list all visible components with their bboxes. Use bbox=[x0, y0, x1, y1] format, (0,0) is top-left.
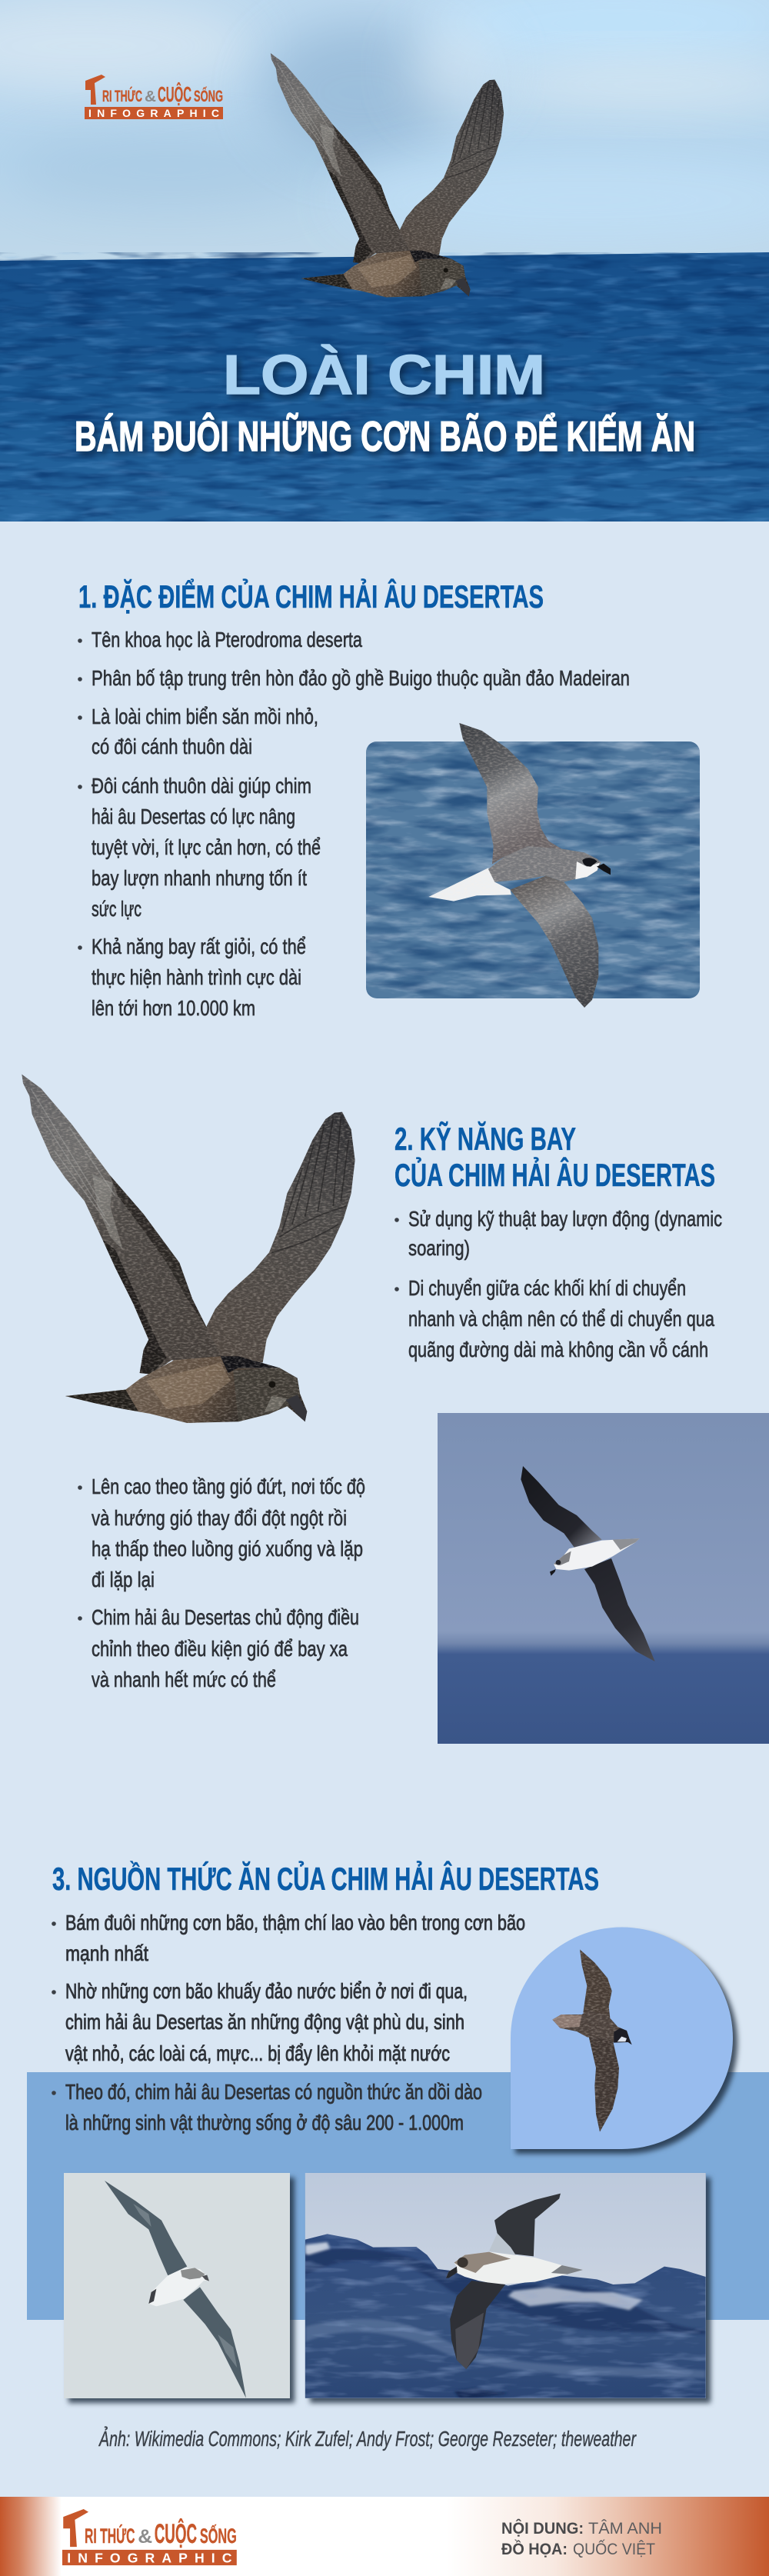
bullet list: section 2 left: Lên cao theo tầng gió đứt, nơi tốc độ bbox=[92, 1475, 365, 1498]
bullet list: section 3: Theo đó, chim hải âu Desertas có nguồn thức ăn dồi dào bbox=[65, 2080, 482, 2104]
logo: Tri Thức & Cuộc Sống Infographic: INFOGRAPHIC bbox=[88, 107, 219, 119]
logo: Tri Thức & Cuộc Sống Infographic: SỐNG bbox=[194, 87, 223, 105]
photo: grey petrel over sea bbox=[428, 723, 611, 1008]
hero sea bbox=[0, 252, 769, 522]
panel: footer bbox=[0, 2497, 769, 2576]
footer credits bbox=[501, 2519, 662, 2558]
bullet list: section 1: tuyệt vời, ít lực cản hơn, có thể bbox=[92, 835, 321, 859]
bullet list: section 2 right: Di chuyển giữa các khối khí di chuyển bbox=[408, 1276, 686, 1300]
bullet list: section 2 left: hạ thấp theo luồng gió xuống và lặp bbox=[92, 1537, 363, 1561]
panel: section 3 food source bbox=[27, 1860, 769, 2451]
bullet list: section 1: Khả năng bay rất giỏi, có thể bbox=[92, 935, 306, 958]
bullet list: section 1: bay lượn nhanh nhưng tốn ít bbox=[92, 866, 307, 890]
logo: Tri Thức & Cuộc Sống Infographic bbox=[85, 75, 223, 119]
bullet list: section 1: Là loài chim biển săn mồi nhỏ, bbox=[92, 705, 318, 728]
footer logo: & bbox=[138, 2526, 152, 2548]
bullet list: section 3: Bám đuôi những cơn bão, thậm chí lao vào bên trong cơn bão bbox=[65, 1911, 525, 1934]
bullet list: section 3: mạnh nhất bbox=[65, 1941, 148, 1965]
heading: section 2 bbox=[394, 1121, 715, 1193]
bullet list: section 1: Tên khoa học là Pterodroma deserta bbox=[92, 628, 362, 651]
bullet list: section 1: thực hiện hành trình cực dài bbox=[92, 965, 301, 989]
photo: petrel above horizon bbox=[438, 1413, 769, 1744]
bullet list: section 2 left: và hướng gió thay đổi đột ngột rồi bbox=[92, 1506, 347, 1530]
title: Loài chim: LOÀI CHIM bbox=[223, 345, 545, 406]
bullet list: section 1: Đôi cánh thuôn dài giúp chim bbox=[92, 774, 311, 798]
bullet list: section 1: lên tới hơn 10.000 km bbox=[92, 996, 255, 1020]
panel: section 1 characteristics bbox=[78, 578, 700, 1020]
bullet list: section 3: là những sinh vật thường sống ở độ sâu 200 - 1.000m bbox=[65, 2111, 464, 2134]
large dark petrel bbox=[22, 1075, 355, 1423]
footer logo: RI THỨC bbox=[85, 2524, 135, 2548]
panel: hero banner bbox=[0, 0, 769, 522]
logo: Tri Thức & Cuộc Sống Infographic: & bbox=[145, 88, 156, 105]
footer credits: TÂM ANH bbox=[588, 2520, 662, 2538]
logo: Tri Thức & Cuộc Sống Infographic: RI THỨC bbox=[102, 87, 142, 105]
footer logo: CUỘC bbox=[155, 2518, 197, 2549]
logo: Tri Thức & Cuộc Sống Infographic: CUỘC bbox=[158, 82, 191, 106]
hero sky bbox=[0, 0, 769, 269]
bullet list: section 1 bbox=[78, 628, 630, 1020]
footer logo bbox=[62, 2509, 237, 2565]
bullet list: section 1: sức lực bbox=[92, 897, 141, 921]
footer credits: QUỐC VIỆT bbox=[573, 2540, 655, 2558]
bullet list: section 3: vật nhỏ, các loài cá, mực... bị đẩy lên khỏi mặt nước bbox=[65, 2041, 450, 2065]
bullet list: section 3 bbox=[52, 1911, 525, 2134]
footer credits: ĐỒ HỌA: bbox=[501, 2540, 568, 2558]
footer background bbox=[0, 2497, 769, 2576]
bullet list: section 1: có đôi cánh thuôn dài bbox=[92, 735, 252, 758]
footer logo: INFOGRAPHIC bbox=[67, 2550, 232, 2565]
bullet list: section 2 left: đi lặp lại bbox=[92, 1568, 155, 1591]
footer logo: SỐNG bbox=[200, 2524, 237, 2548]
blue band bbox=[27, 2072, 769, 2320]
heading: section 1: 1. ĐẶC ĐIỂM CỦA CHIM HẢI ÂU DESERTAS bbox=[78, 578, 544, 615]
photo: circular blue sky frame with petrel bbox=[511, 1928, 733, 2149]
bullet list: section 2 right: soaring) bbox=[408, 1236, 470, 1260]
bullet list: section 1: Phân bố tập trung trên hòn đảo gồ ghề Buigo thuộc quần đảo Madeiran bbox=[92, 666, 630, 690]
footer credits: NỘI DUNG: bbox=[501, 2519, 584, 2538]
bullet list: section 2 right bbox=[394, 1207, 722, 1361]
panel: section 2 flight skills bbox=[22, 1075, 769, 1744]
bullet list: section 2 left: chỉnh theo điều kiện gió để bay xa bbox=[92, 1637, 348, 1661]
photo: sea background bbox=[366, 741, 700, 998]
photo: petrel against pale sky bbox=[64, 2173, 290, 2398]
bullet list: section 3: chim hải âu Desertas ăn những động vật phù du, sinh bbox=[65, 2010, 464, 2034]
bullet list: section 2 left: Chim hải âu Desertas chủ động điều bbox=[92, 1605, 359, 1629]
heading: section 2: 2. KỸ NĂNG BAY bbox=[394, 1121, 576, 1157]
photo: petrel over big wave bbox=[305, 2173, 706, 2398]
bullet list: section 1: hải âu Desertas có lực nâng bbox=[92, 805, 295, 828]
bullet list: section 2 left bbox=[78, 1475, 365, 1691]
hero bird bbox=[271, 53, 504, 297]
bullet list: section 3: Nhờ những cơn bão khuấy đảo nước biển ở nơi đi qua, bbox=[65, 1979, 468, 2003]
bullet list: section 2 left: và nhanh hết mức có thể bbox=[92, 1668, 276, 1691]
